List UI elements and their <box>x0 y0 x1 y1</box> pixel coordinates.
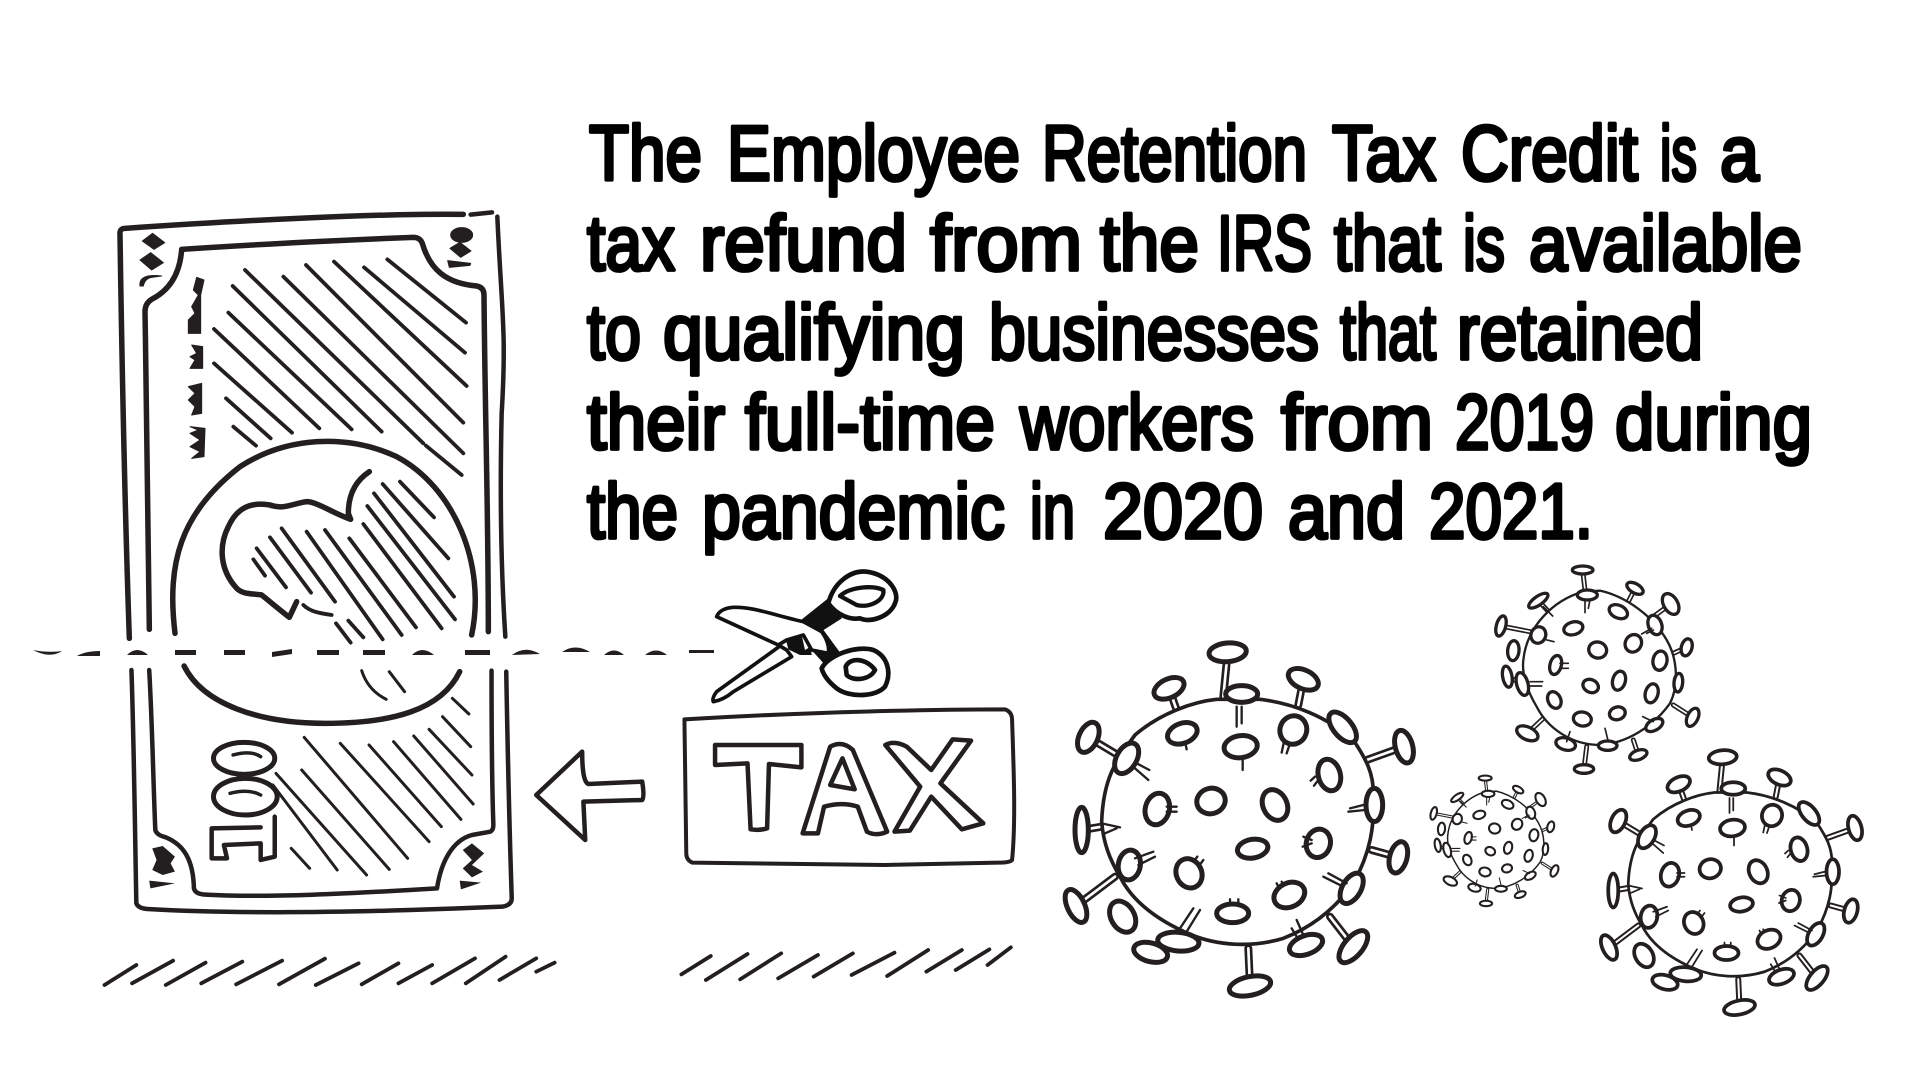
heading text block: from <box>1281 378 1433 466</box>
heading text block: Employee <box>727 109 1020 197</box>
heading text block: full-time <box>745 378 995 466</box>
TAX sign <box>684 709 1014 865</box>
heading text block: that <box>1334 199 1441 287</box>
heading text block: during <box>1615 378 1812 466</box>
icon: banknote cut in two <box>120 212 512 912</box>
letters TAX <box>715 739 983 834</box>
heading text block: Tax <box>1332 109 1436 197</box>
heading text block <box>587 109 1812 555</box>
heading text block: businesses <box>989 288 1319 376</box>
heading text block: workers <box>1019 378 1254 466</box>
icon: large virus <box>1061 641 1417 999</box>
heading text block: the <box>1100 199 1199 287</box>
icon: upper virus <box>1494 566 1702 773</box>
arrow pointing left <box>536 752 643 840</box>
heading text block: Retention <box>1042 109 1307 197</box>
heading text block: 2020 <box>1103 467 1263 555</box>
heading text block: IRS <box>1217 199 1312 287</box>
heading text block: from <box>930 199 1082 287</box>
heading text block: Credit <box>1461 109 1638 197</box>
heading text block: pandemic <box>702 467 1005 555</box>
heading text block: available <box>1529 199 1802 287</box>
heading text block: in <box>1030 467 1075 555</box>
heading text block: is <box>1660 109 1697 197</box>
heading text block: 2021. <box>1429 467 1593 555</box>
icon: lower right virus <box>1598 749 1865 1018</box>
heading text block: a <box>1720 109 1760 197</box>
banknote upper half <box>120 212 505 643</box>
dashed cut line <box>33 648 714 657</box>
heading text block: tax <box>587 199 675 287</box>
ground hatch marks under banknote <box>104 957 555 985</box>
heading text block: their <box>587 378 725 466</box>
heading text block: The <box>589 109 702 197</box>
icon: small virus <box>1429 776 1560 906</box>
heading text block: the <box>587 467 678 555</box>
heading text block: 2019 <box>1455 378 1594 466</box>
heading text block: retained <box>1457 288 1703 376</box>
heading text block: refund <box>700 199 907 287</box>
banknote lower half <box>131 666 512 912</box>
heading text block: is <box>1463 199 1505 287</box>
heading text block: and <box>1288 467 1405 555</box>
heading text block: to <box>587 288 641 376</box>
heading text block: qualifying <box>663 288 965 376</box>
ground hatch marks under TAX sign <box>681 947 1011 980</box>
heading text block: that <box>1340 288 1436 376</box>
sign box <box>684 709 1014 865</box>
icon: scissors <box>713 572 896 702</box>
